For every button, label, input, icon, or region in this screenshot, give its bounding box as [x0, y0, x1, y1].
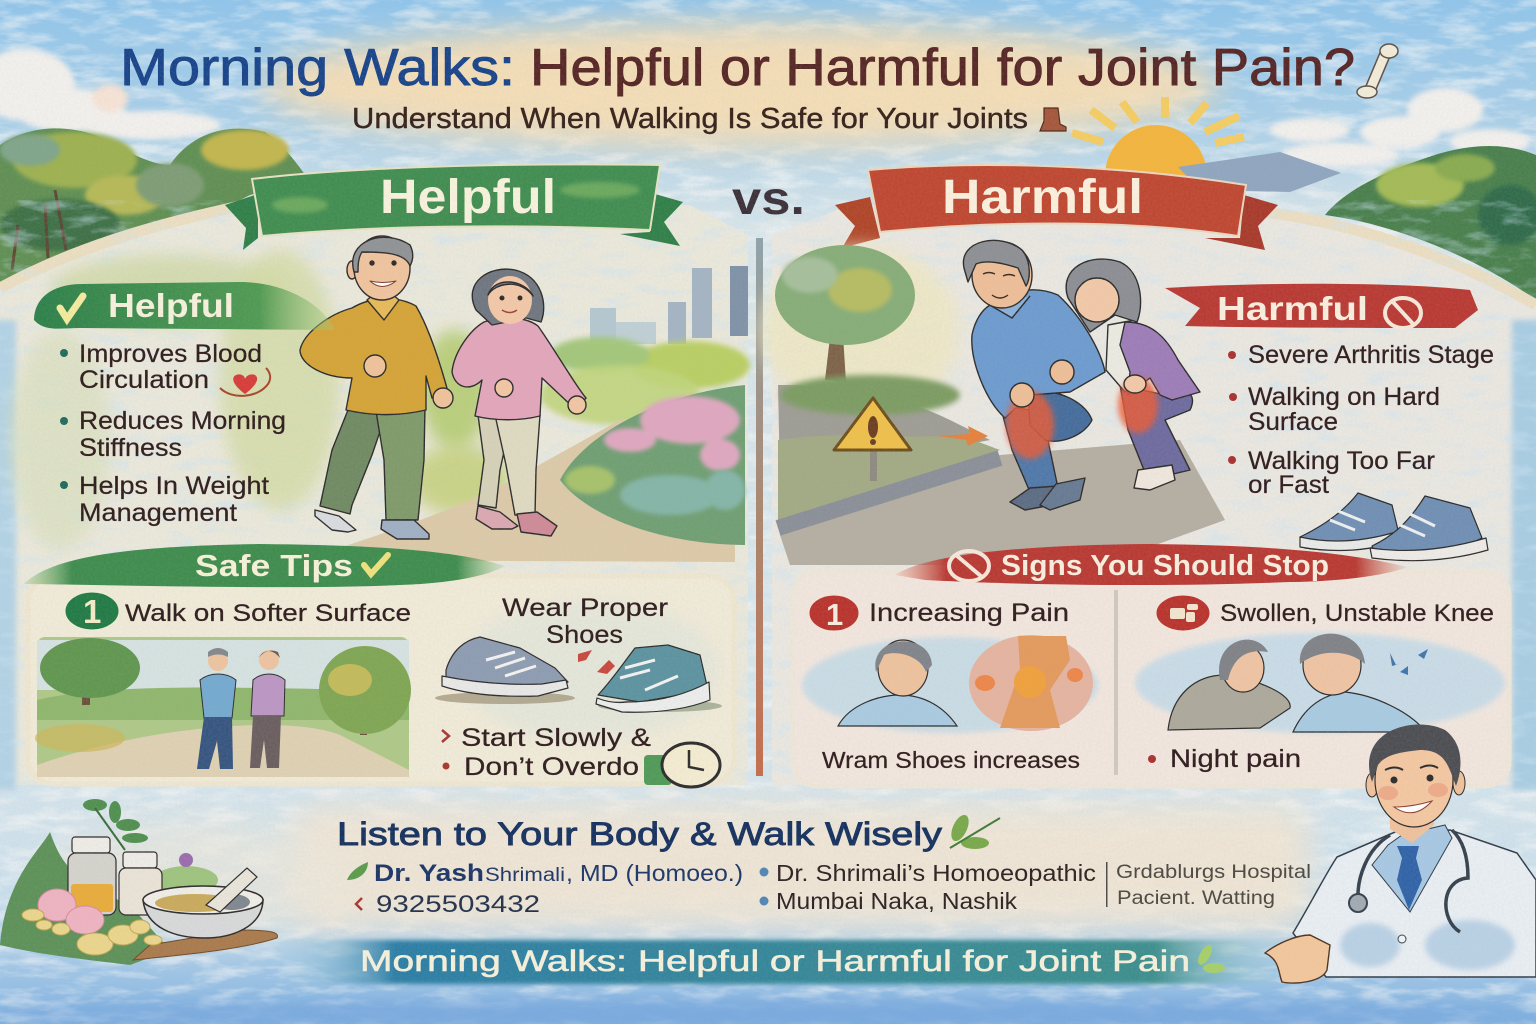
- panel label: Helpful: [34, 282, 335, 330]
- icon: leaf: [1195, 943, 1225, 973]
- icon: check mark: [364, 555, 388, 574]
- trees: top left: [0, 128, 310, 285]
- tip 2: proper shoes: [435, 594, 722, 712]
- scene: harmful park background: [760, 245, 1225, 565]
- panel label: Helpful: Helpful: [108, 287, 234, 324]
- icon: boot: [1040, 108, 1066, 131]
- sign 1: increasing pain: Wram Shoes increases: [822, 747, 1080, 773]
- banner: Safe Tips: [24, 544, 505, 587]
- tip 1: softer surface: 1: [83, 593, 101, 630]
- icon: check mark: [60, 296, 83, 319]
- vs label: vs.: [732, 172, 805, 224]
- banner: Signs You Should Stop: Signs You Should Stop: [1001, 550, 1329, 582]
- panel: right arch: [0, 205, 1536, 790]
- illustration: doctor: [1265, 724, 1536, 983]
- sign 1: increasing pain: Increasing Pain: [869, 599, 1069, 627]
- sign 1: increasing pain: [802, 595, 1098, 773]
- trees: top right: [1325, 146, 1536, 300]
- ribbon: Harmful: Harmful: [942, 171, 1143, 224]
- tip 2: proper shoes: Wear Proper: [502, 594, 668, 622]
- list: helpful benefits: Helps In Weight: [79, 472, 269, 500]
- scene: night pain couple: [1135, 633, 1505, 733]
- panel: left arch: [0, 205, 748, 785]
- illustration: walking man: [300, 236, 453, 539]
- subtitle: Understand When Walking Is Safe for Your Joints: [352, 103, 1028, 135]
- icon: prohibited: [949, 551, 989, 581]
- ribbon: Helpful: [225, 164, 683, 250]
- icon: prohibited: [1385, 298, 1421, 328]
- footer heading: Listen to Your Body & Walk Wisely: [337, 816, 942, 852]
- contact details: Dr. Yash: [374, 860, 484, 887]
- illustration: hurting woman: [1066, 259, 1200, 490]
- contact details: 9325503432: [376, 891, 540, 918]
- icon: worn shoes: [1300, 493, 1488, 561]
- tip 3: start slowly: Start Slowly &: [461, 724, 651, 752]
- panel label: Harmful: Harmful: [1217, 290, 1368, 327]
- illustration: walking woman: [452, 269, 586, 536]
- list: helpful benefits: Management: [79, 499, 237, 527]
- list: helpful benefits: [60, 340, 286, 527]
- icon: heart circulation: [220, 368, 270, 396]
- sign 2: swollen knee: Night pain: [1170, 745, 1301, 773]
- tip 1: softer surface: Walk on Softer Surface: [125, 600, 411, 627]
- list: helpful benefits: Reduces Morning: [79, 407, 286, 435]
- list: harmful causes: Surface: [1248, 408, 1338, 436]
- contact details: , MD (Homoeo.): [566, 860, 743, 886]
- list: harmful causes: Walking on Hard: [1248, 383, 1440, 411]
- title: [120, 39, 1355, 97]
- contact details: Mumbai Naka, Nashik: [776, 888, 1018, 914]
- contact details: [347, 860, 1311, 918]
- contact details: Dr. Shrimali’s Homoeopathic: [776, 860, 1096, 886]
- ribbon: Helpful: Helpful: [380, 171, 556, 224]
- icon: clock and bottle: [644, 743, 720, 787]
- contact details: Shrimali: [485, 865, 565, 886]
- list: helpful benefits: Circulation: [79, 366, 209, 394]
- contact details: Pacient. Watting: [1117, 888, 1275, 909]
- sign 2: swollen knee: Swollen, Unstable Knee: [1220, 600, 1494, 627]
- title: Morning Walks:: [120, 39, 515, 97]
- sun with rays: [1072, 97, 1341, 227]
- list: harmful causes: Walking Too Far: [1248, 447, 1435, 475]
- panel: safe tips: [28, 576, 734, 784]
- banner: Signs You Should Stop: [895, 544, 1407, 585]
- list: helpful benefits: Improves Blood: [79, 340, 262, 368]
- mottled panel washes: [0, 200, 1536, 800]
- icon: grey shoe: [442, 637, 568, 696]
- list: helpful benefits: Stiffness: [79, 434, 182, 462]
- icon: teal shoe: [596, 645, 710, 712]
- sign 1: increasing pain: 1: [826, 597, 843, 632]
- footer heading: [337, 812, 1000, 852]
- title: Helpful or Harmful for Joint Pain?: [530, 39, 1355, 97]
- ribbon: Harmful: [835, 165, 1278, 250]
- scene: couple in park: [35, 637, 411, 777]
- list: harmful causes: Severe Arthritis Stage: [1248, 341, 1494, 369]
- banner: Safe Tips: Safe Tips: [195, 548, 353, 583]
- icon: bone: [1357, 44, 1398, 98]
- contact details: Grdablurgs Hospital: [1116, 862, 1311, 883]
- bottom banner: [270, 940, 1310, 984]
- tip 3: start slowly: Don’t Overdo: [464, 753, 639, 781]
- scene: helpful park background: [300, 266, 750, 562]
- scene: man and knee: [802, 635, 1098, 733]
- bottom banner: Morning Walks: Helpful or Harmful for Joint Pain: [360, 945, 1190, 978]
- list: harmful causes: [1228, 341, 1494, 499]
- panel label: Harmful: [1165, 284, 1478, 328]
- illustration: remedies: [0, 799, 278, 965]
- illustration: hurting man: [963, 240, 1105, 510]
- tip 1: softer surface: [35, 592, 411, 777]
- tip 2: proper shoes: Shoes: [546, 621, 623, 649]
- sign 2: swollen knee: [1135, 595, 1505, 773]
- tip 3: start slowly: [442, 724, 720, 787]
- icon: leaf: [948, 812, 1000, 849]
- panel: signs you should stop: [793, 572, 1509, 786]
- icon: warning sign and arrow: [834, 398, 988, 481]
- list: harmful causes: or Fast: [1248, 471, 1329, 499]
- center divider: [756, 238, 763, 776]
